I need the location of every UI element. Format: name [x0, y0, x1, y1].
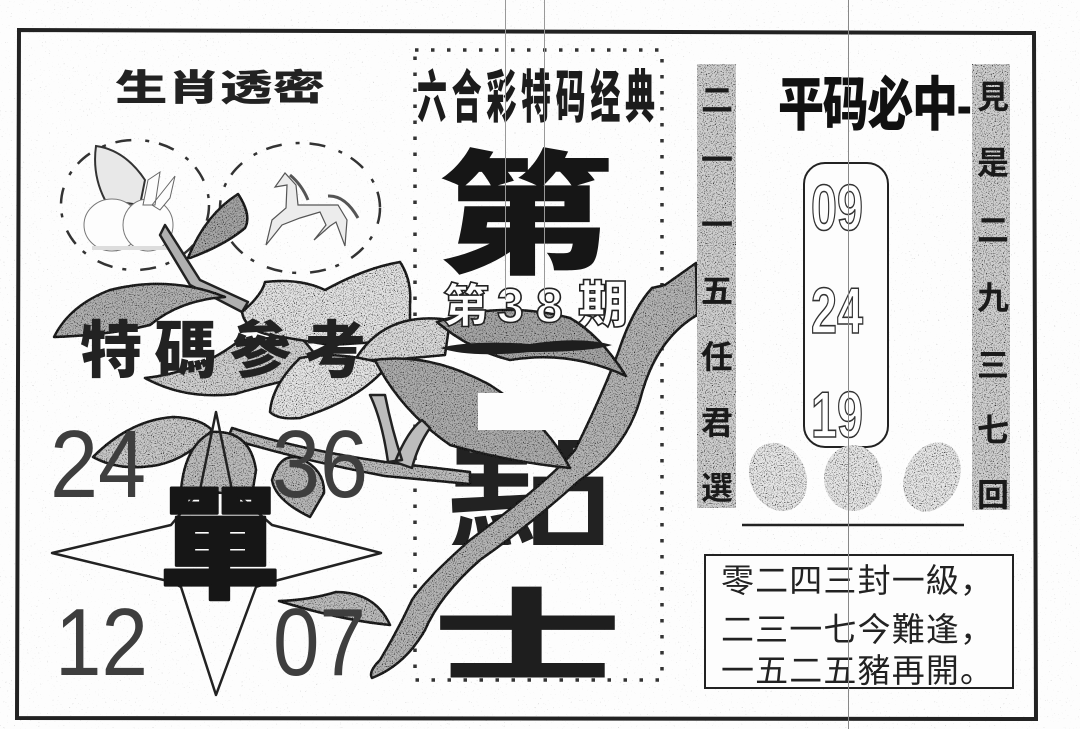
title: classic special numbers: 六合彩特码经典 [417, 66, 655, 130]
right gray column: 回 [977, 477, 1009, 513]
issue label: issue 38: 期 [578, 277, 628, 333]
small bottom leaf [279, 592, 390, 625]
numbers: special codes: 12 [55, 590, 148, 696]
issue label: issue 38: 第 [443, 280, 489, 332]
dotted panel border [415, 50, 662, 680]
stem upper [160, 225, 248, 312]
leaf under 36 [272, 457, 324, 517]
left lower leaf [93, 417, 212, 467]
issue label: issue 38 [443, 277, 628, 333]
left gray column [697, 64, 736, 508]
poem box: 零二四三封一級， [721, 562, 993, 599]
main branch [371, 263, 697, 678]
right gray column [972, 64, 1010, 513]
large character: di: 第 [437, 143, 613, 292]
numbers: special codes: 36 [272, 411, 368, 518]
issue label: issue 38: 8 [536, 280, 563, 333]
number capsule: 19 [811, 380, 863, 452]
large brush character behind branches: 點 [445, 387, 615, 577]
zodiac circle: horse [220, 143, 380, 273]
poem box [705, 555, 1013, 689]
heading: zodiac hint: 生肖透密 [115, 67, 325, 108]
left gray column: 一 [701, 142, 733, 178]
right gray column: 七 [977, 412, 1009, 448]
poem box: 一五二五豬再開。 [721, 652, 993, 689]
left gray column: 選 [701, 470, 733, 506]
single character badge: 單 [159, 478, 281, 614]
left gray column: 任 [701, 339, 733, 375]
left gray column: 二 [701, 82, 733, 118]
lower petal [270, 355, 388, 418]
left gray column: 五 [701, 273, 733, 309]
label: special number reference: 特碼參考 [80, 317, 366, 386]
number capsule [804, 163, 888, 452]
upright twig [370, 395, 430, 468]
banner leaf [145, 336, 330, 395]
issue label: issue 38: 3 [497, 280, 524, 333]
poem box: 二三一七今難逢， [721, 611, 993, 648]
flower and branch illustration [54, 194, 697, 678]
censored white patch [478, 393, 550, 430]
right gray column: 九 [977, 280, 1009, 316]
left gray column: 一 [701, 207, 733, 243]
number capsule: 24 [811, 276, 863, 348]
four pointed star [52, 412, 381, 695]
zodiac circle: rabbit [61, 140, 209, 270]
large brush character: shi: 士 [432, 582, 622, 694]
right gray column: 二 [977, 212, 1009, 248]
bud leaf [188, 194, 247, 258]
right gray column: 是 [977, 145, 1009, 181]
right gray column: 三 [977, 347, 1009, 383]
left gray column: 君 [701, 405, 733, 441]
horizontal branch [228, 428, 470, 484]
large petal [242, 262, 410, 345]
fingerprints [739, 433, 972, 521]
heavy stroke across leaf [440, 340, 612, 354]
central bud [181, 432, 256, 495]
heading: guaranteed numbers: 平码必中- [778, 73, 972, 138]
right gray column: 見 [977, 79, 1009, 115]
numbers: special codes: 07 [273, 590, 366, 696]
numbers: special codes [50, 411, 368, 696]
left leaf [54, 284, 225, 337]
middle petal [355, 318, 450, 360]
number capsule: 09 [811, 173, 863, 245]
right lower leaf [375, 358, 570, 468]
big right leaf [437, 310, 626, 376]
numbers: special codes: 24 [50, 411, 146, 518]
